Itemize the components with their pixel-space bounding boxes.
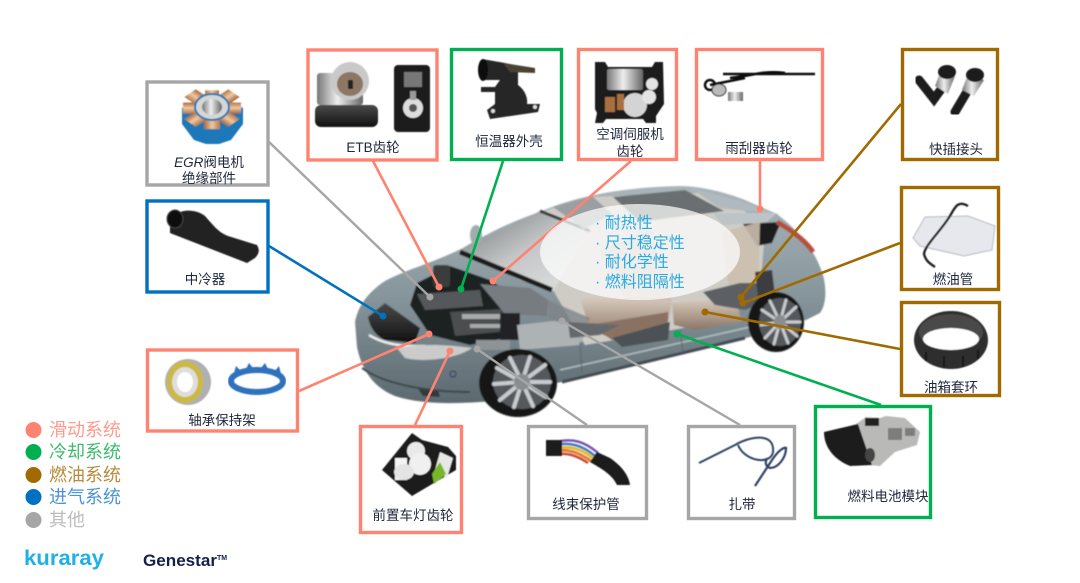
legend: 冷却系统 [49,442,121,462]
icon: connectors [919,65,984,112]
icon: ring [914,311,988,369]
legend: 进气系统 [49,487,121,507]
panel: quick connector: 快插接头 [929,141,983,157]
panel: fuel pipe [902,188,998,290]
panel: AC servo gear [578,50,676,160]
panel: headlamp gear: 前置车灯齿轮 [372,507,454,523]
leader line: fuel pipe [740,243,900,306]
panel: wiper gear: 雨刮器齿轮 [725,141,793,156]
icon: retainer ring [231,363,283,395]
leader line: AC servo [490,161,631,284]
panel: intercooler [147,201,268,292]
icon: throttle body [315,62,378,127]
panel: thermostat housing [452,50,562,160]
panel: fuel pipe: 燃油管 [933,271,973,287]
leader line: bearing [299,330,432,391]
legend: 滑动系统 [49,420,121,440]
panel: EGR valve motor insulation: EGR阀电机 [174,155,244,170]
front wheel [479,349,557,417]
car illustration [355,186,825,417]
panel: intercooler: 中冷器 [185,272,226,287]
icon: tank and pipe [913,204,995,267]
icon: servo [595,62,664,123]
icon: gear plate [394,65,430,132]
logo: Genestar: TM [217,555,227,562]
panel: tank ring [902,302,1000,396]
logo: kuraray: kuraray [24,547,104,570]
panel: AC servo gear: 齿轮 [616,144,644,159]
leader line: intercooler [269,246,386,320]
leader line: ETB [373,161,442,290]
logo: Genestar: Genestar [143,552,218,570]
callout: properties [540,204,740,300]
icon: ties [699,438,786,486]
panel: headlamp gear [360,426,462,532]
panel: bearing retainer: 轴承保持架 [188,413,256,428]
panel: fuel cell module: 燃料电池模块 [848,488,929,504]
callout: properties: · 燃料阻隔性 [595,273,685,291]
callout: properties: · 耐热性 [595,214,653,232]
leader line: fuel tank ring [702,308,900,349]
legend [26,420,121,530]
icon: bearing [165,359,211,405]
panel: harness tube [528,426,646,518]
icon: duct [167,210,259,263]
icon: gearbox [382,433,456,496]
leader line: thermostat [458,161,503,292]
icon: housing [478,59,540,119]
legend: 燃油系统 [49,465,121,485]
panel: fuel cell module [816,406,930,518]
panel: harness tube: 线束保护管 [552,497,620,512]
panel: AC servo gear: 空调伺服机 [596,127,664,142]
panel: EGR valve motor insulation: 绝缘部件 [182,171,236,186]
panel: wiper gear [696,50,822,160]
leader line: wiper [756,161,764,212]
legend: 其他 [49,510,85,530]
callout: properties: · 耐化学性 [595,253,669,271]
panel: EGR valve motor insulation [147,82,268,186]
icon: wiper [705,72,815,101]
panel: thermostat housing: 恒温器外壳 [475,134,543,149]
icon: harness [546,440,630,485]
icon: module [824,416,920,466]
leader line: EGR [269,142,434,300]
panel: ETB gear: ETB齿轮 [346,140,400,155]
panel: bearing retainer [148,350,298,431]
panel: tank ring: 油箱套环 [924,380,978,395]
leader line: cable tie [558,318,740,425]
leader line: harness [474,346,587,425]
callout: properties: · 尺寸稳定性 [595,234,685,252]
panel: ETB gear [308,50,437,160]
panel: quick connector [902,50,998,160]
leader line: headlamp [415,348,454,425]
icon: stator [182,89,243,144]
rear wheel [748,292,804,352]
panel: cable tie: 扎带 [728,497,756,512]
leader line: fuel cell [674,330,881,405]
panel: cable tie [688,426,794,518]
leader line: quick connector [738,104,901,300]
